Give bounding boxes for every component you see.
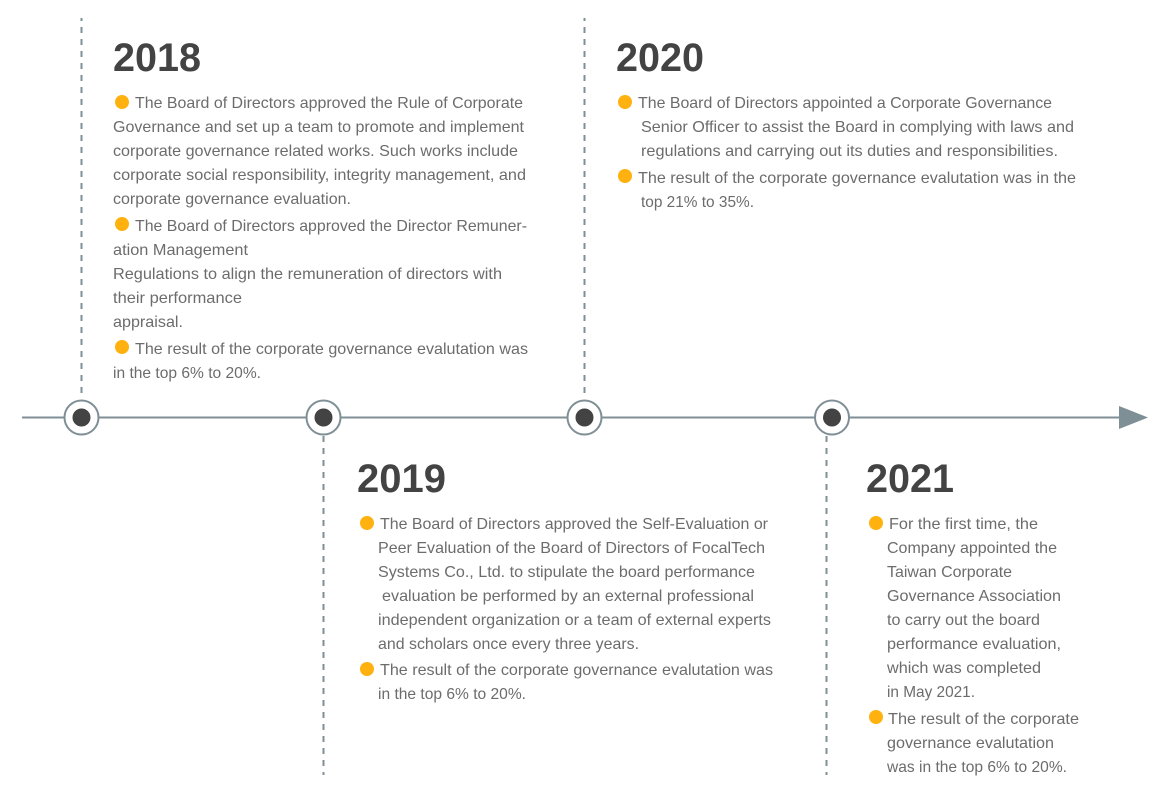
2018 item 3: The result of the corporate governance evalutation was [135, 341, 528, 358]
panel: 2019 [357, 457, 773, 703]
2020 item 2: top 21% to 35%. [641, 194, 754, 211]
panel: 2020 [616, 36, 1076, 211]
2018 item 1: The Board of Directors approved the Rule of Corporate [135, 95, 523, 112]
2020 item 2: The result of the corporate governance evalutation was in the [638, 170, 1076, 187]
2021 item 1: Company appointed the [887, 540, 1057, 557]
2020 item 1: The Board of Directors appointed a Corporate Governance [638, 95, 1052, 112]
2020 item 1: regulations and carrying out its duties and responsibilities. [641, 143, 1058, 160]
2019 item 1: Peer Evaluation of the Board of Directors of FocalTech [378, 540, 765, 557]
2018 item 1: Governance and set up a team to promote and implement [113, 119, 525, 136]
2019 item 2 [360, 662, 773, 703]
2020 item 2 [618, 169, 1076, 211]
2019 item 1: independent organization or a team of external experts [378, 612, 771, 629]
2021 item 1: For the first time, the [889, 516, 1038, 533]
2020 item 1: Senior Officer to assist the Board in complying with laws and [641, 119, 1074, 136]
2018 item 1: corporate governance related works. Such works include [113, 143, 518, 160]
2019 item 2: in the top 6% to 20%. [378, 686, 526, 703]
2021 item 2: governance evalutation [887, 735, 1054, 752]
2021 item 2: was in the top 6% to 20%. [886, 759, 1067, 776]
panel: 2018 [113, 36, 528, 382]
timeline marker 2018 [64, 400, 98, 434]
2018 item 1: corporate social responsibility, integrity management, and [113, 167, 526, 184]
dashed connector 2021 [826, 436, 828, 775]
heading: 2018: 2018 [113, 36, 201, 80]
heading: 2021: 2021 [866, 457, 954, 501]
2018 item 2 [113, 217, 527, 331]
timeline marker 2020 [568, 400, 602, 434]
2019 item 2: The result of the corporate governance evalutation was [380, 662, 773, 679]
2019 item 1: and scholars once every three years. [378, 636, 639, 653]
2019 item 1 [360, 516, 771, 653]
2018 item 3: in the top 6% to 20%. [113, 365, 261, 382]
2021 item 2: The result of the corporate [888, 711, 1079, 728]
2018 item 3 [113, 340, 528, 382]
2018 item 2: ation Management [113, 242, 249, 259]
2018 item 2: their performance [113, 290, 242, 307]
2021 item 2 [869, 710, 1079, 776]
2019 item 1: Systems Co., Ltd. to stipulate the board performance [378, 564, 755, 581]
dashed connector 2018 [80, 18, 82, 398]
panel: 2021 [866, 457, 1079, 776]
timeline marker 2019 [306, 400, 340, 434]
2019 item 1: evaluation be performed by an external professional [382, 588, 754, 605]
heading: 2020: 2020 [616, 36, 704, 80]
2021 item 1: to carry out the board [887, 612, 1040, 629]
heading: 2019: 2019 [357, 457, 446, 501]
2018 item 1 [113, 95, 526, 208]
2018 item 2: appraisal. [113, 314, 183, 331]
2018 item 2: The Board of Directors approved the Director Remuner- [135, 218, 527, 235]
2018 item 2: Regulations to align the remuneration of directors with [113, 266, 502, 283]
2021 item 1: Taiwan Corporate [887, 564, 1012, 581]
2021 item 1 [869, 516, 1061, 701]
dashed connector 2020 [584, 18, 586, 398]
2021 item 1: performance evaluation, [887, 636, 1061, 653]
timeline axis arrow [22, 406, 1148, 429]
2019 item 1: The Board of Directors approved the Self-Evaluation or [380, 516, 769, 533]
timeline marker 2021 [815, 400, 849, 434]
2021 item 1: Governance Association [887, 588, 1061, 605]
dashed connector 2019 [322, 436, 324, 775]
2018 item 1: corporate governance evaluation. [113, 191, 351, 208]
2020 item 1 [618, 95, 1074, 160]
2021 item 1: in May 2021. [887, 684, 975, 701]
2021 item 1: which was completed [886, 660, 1041, 677]
